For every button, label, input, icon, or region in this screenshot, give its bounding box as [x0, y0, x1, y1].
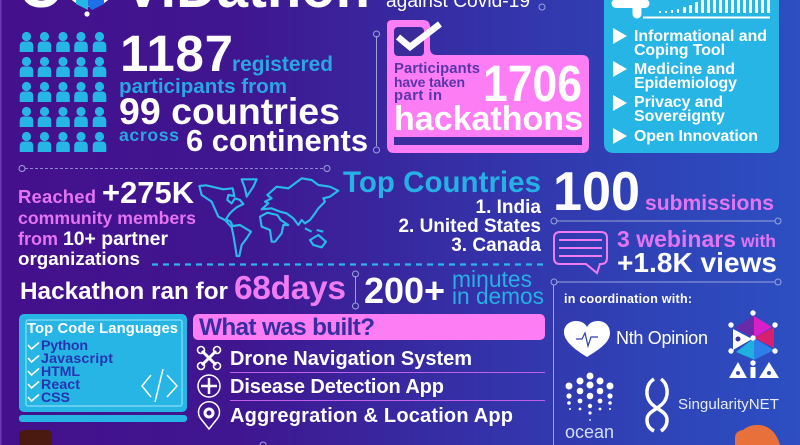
- track names: Privacy and: [634, 94, 723, 111]
- participants statistic: 99 countries: [119, 90, 340, 132]
- participants statistic: 6 continents: [186, 123, 368, 158]
- top countries: Top Countries: [343, 166, 541, 199]
- icon: chat bubble: [554, 232, 607, 273]
- community reach text: Reached: [18, 186, 96, 207]
- what was built heading: What was built?: [199, 314, 375, 341]
- laptop heading: Top Code Languages: [27, 321, 178, 337]
- track names: Open Innovation: [634, 128, 758, 145]
- brown head fragment: [19, 430, 52, 445]
- participants statistic: participants from: [119, 75, 287, 98]
- participants statistic: registered: [232, 53, 333, 76]
- top countries: 2. United States: [398, 216, 541, 237]
- logo: Nth Opinion: Nth Opinion: [616, 328, 708, 348]
- track names: Epidemiology: [634, 75, 737, 92]
- panel: laptop code languages: [19, 314, 187, 422]
- community reach text: +275K: [102, 175, 195, 210]
- language list: HTML: [41, 364, 80, 380]
- webinars statistic: +1.8K views: [617, 247, 777, 278]
- built item: aggregation: Aggregration & Location App: [230, 405, 513, 427]
- demo minutes: minutes: [452, 266, 532, 292]
- track names: Sovereignty: [634, 108, 725, 125]
- 1706 number: 1706: [483, 55, 582, 112]
- icon: people grid: [20, 32, 106, 152]
- demo minutes: in demos: [452, 283, 544, 309]
- community reach text: organizations: [18, 248, 140, 269]
- hackathon duration: [20, 270, 346, 307]
- logo: AiA: [728, 310, 779, 378]
- community reach text: from: [18, 229, 58, 249]
- track names: [634, 28, 767, 145]
- webinars statistic: [617, 226, 777, 278]
- icon: medical plus: [198, 375, 220, 397]
- participants text: part in: [394, 88, 442, 104]
- logo: SingularityNET: SingularityNET: [678, 396, 779, 413]
- track bullets: [613, 28, 627, 144]
- participants statistic: 1187: [120, 25, 233, 82]
- top countries: [343, 166, 541, 256]
- demo minutes: 200+: [364, 270, 445, 311]
- icon: location pin: [198, 402, 220, 429]
- number 4: [616, 0, 645, 14]
- top countries: 3. Canada: [451, 235, 541, 256]
- logo: ocean: [565, 372, 614, 442]
- submissions statistic: [553, 160, 774, 222]
- icon: drone: [198, 346, 220, 370]
- webinars statistic: with: [740, 231, 776, 251]
- language list: [28, 338, 113, 406]
- language list: React: [41, 377, 80, 393]
- histogram: [643, 0, 770, 18]
- webinars statistic: 3 webinars: [617, 226, 736, 252]
- community reach text: community members: [18, 208, 196, 228]
- submissions statistic: submissions: [645, 192, 774, 215]
- track names: Medicine and: [634, 61, 735, 78]
- community reach text: [18, 175, 196, 269]
- language list: Python: [41, 338, 88, 354]
- orange logo fragment: [735, 425, 780, 445]
- top countries: 1. India: [476, 197, 541, 218]
- what was built heading: [193, 314, 545, 341]
- coordination heading: in coordination with:: [564, 292, 692, 306]
- participants text: have taken: [394, 74, 465, 90]
- world map: [199, 178, 338, 256]
- logo: ocean: ocean: [565, 422, 614, 442]
- built item: disease: Disease Detection App: [230, 376, 444, 398]
- panel: hackathons: [387, 20, 589, 153]
- title: [18, 0, 370, 20]
- language list: Javascript: [41, 351, 113, 367]
- language list: CSS: [41, 390, 70, 406]
- hackathons word: hackathons: [394, 100, 583, 138]
- participants statistic: [119, 25, 368, 158]
- icon: title shield: [76, 0, 104, 17]
- built item: drone: Drone Navigation System: [230, 348, 472, 370]
- logo: Nth Opinion: [564, 321, 708, 357]
- participants text: Participants: [394, 61, 480, 77]
- hackathon duration: Hackathon ran for: [20, 278, 229, 305]
- participants text: [394, 61, 480, 104]
- hackathon duration: 68days: [234, 270, 346, 307]
- panel: four tracks: [604, 0, 779, 153]
- track names: Informational and: [634, 28, 767, 45]
- demo minutes: [364, 266, 544, 311]
- community reach text: 10+ partner: [63, 228, 168, 250]
- icon: code brackets: [142, 369, 177, 402]
- logo: SingularityNET: [647, 379, 779, 431]
- icon: checkbox: [394, 24, 440, 56]
- participants statistic: across: [119, 125, 179, 145]
- submissions statistic: 100: [553, 160, 640, 222]
- track names: Coping Tool: [634, 42, 725, 59]
